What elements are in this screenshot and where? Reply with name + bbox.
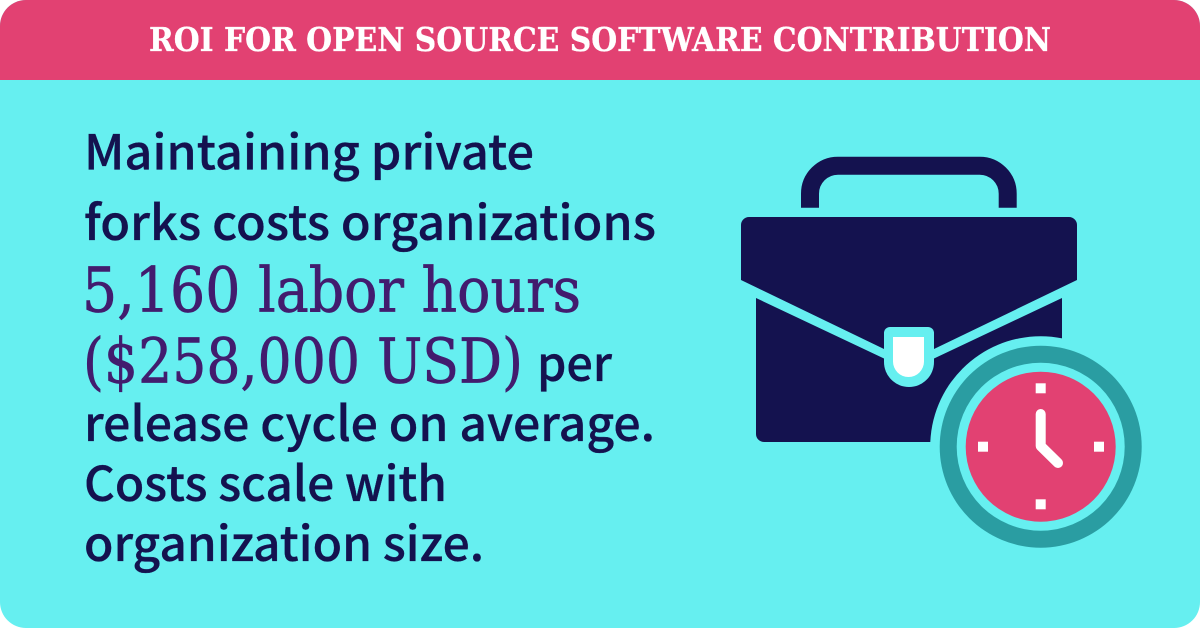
briefcase flap xyxy=(741,217,1077,349)
icon: briefcase xyxy=(741,166,1077,442)
highlighted statistic: labor hours: 5,160 labor hours xyxy=(82,254,581,327)
title: ROI FOR OPEN SOURCE SOFTWARE CONTRIBUTION xyxy=(149,20,1051,59)
text block: forks cost statement: Costs scale with xyxy=(84,445,447,515)
highlighted statistic: cost: ($258,000 USD) xyxy=(83,324,523,397)
text block: forks cost statement: release cycle on average. xyxy=(84,385,655,455)
clock ticks xyxy=(978,383,1104,509)
text block: forks cost statement: forks costs organizations xyxy=(84,184,656,254)
briefcase body xyxy=(756,298,1062,442)
icon: clock xyxy=(930,336,1151,557)
briefcase handle xyxy=(810,166,1008,208)
text block: forks cost statement: organization size. xyxy=(84,505,484,575)
clock hands xyxy=(1041,414,1058,463)
header banner xyxy=(0,0,1200,80)
briefcase clasp xyxy=(884,327,934,387)
text block: forks cost statement: Maintaining private xyxy=(84,114,534,184)
text block: forks cost statement: per xyxy=(537,325,612,395)
text block: forks cost statement xyxy=(82,114,656,575)
